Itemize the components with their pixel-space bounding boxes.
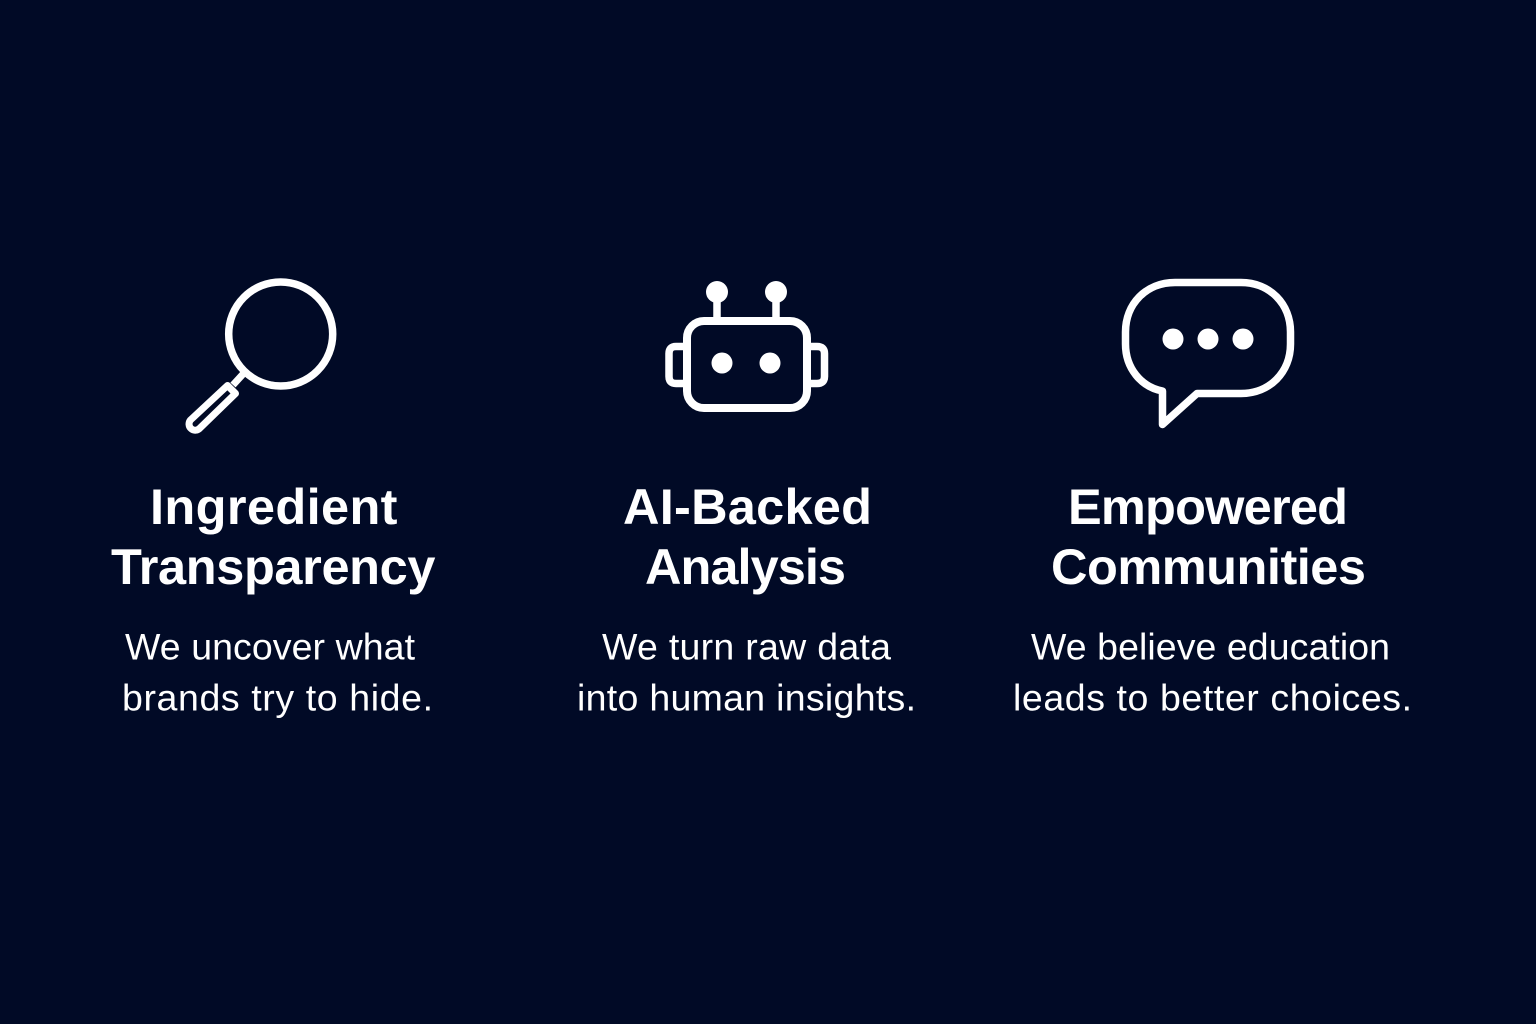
icon: robot: [669, 281, 824, 408]
text: ai-backed analysis description: into human insights.: [577, 676, 916, 718]
text: empowered communities description: leads to better choices.: [1013, 676, 1412, 718]
text: empowered communities description: We believe education: [1031, 626, 1390, 668]
panel: ingredient transparency: [111, 282, 436, 718]
heading: empowered communities: Communities: [1051, 538, 1366, 595]
text: ingredient transparency description: brands try to hide.: [122, 676, 433, 718]
heading: ingredient transparency: Transparency: [111, 538, 436, 595]
heading: ingredient transparency: Ingredient: [150, 478, 398, 535]
heading: empowered communities: Empowered: [1068, 478, 1348, 535]
icon: speech bubble: [1126, 282, 1290, 424]
panel: empowered communities: [1013, 282, 1412, 718]
panel: ai-backed analysis: [577, 281, 916, 718]
text: ai-backed analysis description: We turn raw data: [602, 626, 891, 668]
icon: magnifying glass: [189, 282, 333, 430]
text: ingredient transparency description: We uncover what: [125, 626, 416, 668]
heading: ai-backed analysis: Analysis: [645, 538, 846, 595]
heading: ai-backed analysis: AI-Backed: [623, 478, 872, 535]
